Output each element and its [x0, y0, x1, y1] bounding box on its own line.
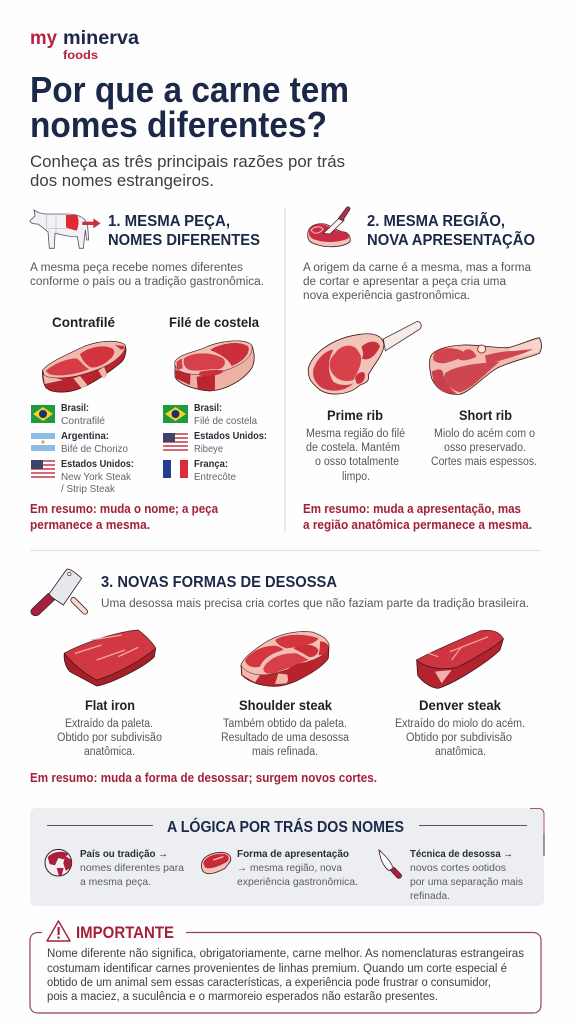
text: shoulder steak description: mais refinada. — [252, 746, 318, 758]
label: Estados Unidos: Estados Unidos: — [61, 458, 134, 470]
flag: França — [163, 460, 188, 478]
icon: globe — [45, 849, 72, 876]
label: França: França: — [194, 458, 228, 470]
flags and names: contrafilé — [31, 402, 134, 495]
text: prime rib description: Mesma região do filé — [306, 428, 405, 440]
label: Argentina: Bifé de Chorizo — [61, 443, 128, 455]
text: prime rib description: de costela. Mantém — [306, 442, 400, 454]
label: Brasil: Brasil: — [61, 402, 89, 414]
text: short rib description: Miolo do acém com o — [434, 428, 535, 440]
text: país ou tradição — [80, 848, 184, 888]
label: França — [194, 458, 236, 483]
text: flat iron description: Obtido por subdivisão — [57, 732, 162, 744]
label: França: Entrecôte — [194, 471, 236, 483]
text: técnica de desossa: por uma separação mais — [410, 876, 523, 888]
flag: Brasil — [163, 405, 188, 423]
text: forma de apresentação: Forma de apresentação — [237, 848, 349, 860]
label: Argentina — [61, 430, 128, 455]
text: denver steak description — [395, 718, 525, 758]
heading — [108, 213, 260, 249]
heading: NOMES DIFERENTES — [108, 232, 260, 249]
label: Estados Unidos: New York Steak — [61, 471, 132, 483]
text: forma de apresentação: experiência gastronômica. — [237, 876, 358, 888]
label: Brasil — [61, 402, 105, 427]
icon: shoulder steak — [241, 632, 329, 686]
text: forma de apresentação — [237, 848, 358, 888]
cut name: Denver steak: Denver steak — [419, 697, 501, 713]
title: Por que a carne tem — [30, 69, 349, 110]
label: Estados Unidos: / Strip Steak — [61, 483, 116, 495]
panel: section 1 mesma peça — [30, 210, 267, 532]
description: de cortar e apresentar a peça cria uma — [303, 276, 507, 288]
icon: steak with knife — [308, 207, 350, 247]
text: denver steak description: Obtido por subdivisão — [406, 732, 512, 744]
heading: 1. MESMA PEÇA, — [108, 213, 230, 230]
label: Estados Unidos — [61, 458, 134, 495]
cut name: Flat iron: Flat iron — [85, 697, 135, 713]
icon: filé de costela steak — [175, 341, 254, 391]
description: Uma desossa mais precisa cria cortes que não faziam parte da tradição brasileira. — [101, 598, 529, 610]
text: warning body: costumam identificar carnes provenientes de linhas premium. Quando um corte especial é — [47, 963, 507, 975]
text: warning body: Nome diferente não significa, obrigatoriamente, carne melhor. As nomenclaturas estrangeiras — [47, 948, 524, 960]
label: Estados Unidos — [194, 430, 267, 455]
text: warning body — [47, 948, 524, 1003]
label: Brasil — [194, 402, 257, 427]
flag: Estados Unidos — [163, 433, 188, 451]
description: A mesma peça recebe nomes diferentes — [30, 262, 243, 274]
text: técnica de desossa: Técnica de desossa → — [410, 848, 513, 860]
icon: warning triangle — [47, 921, 70, 941]
cut name: Filé de costela: Filé de costela — [169, 314, 259, 330]
flag: Estados Unidos — [31, 460, 55, 478]
heading: IMPORTANTE — [76, 923, 174, 942]
label: Argentina: Argentina: — [61, 430, 109, 442]
summary: Em resumo: muda a forma de desossar; surgem novos cortes. — [30, 771, 377, 785]
summary: Em resumo: muda a apresentação, mas — [303, 502, 521, 516]
heading: 2. MESMA REGIÃO, — [367, 212, 505, 230]
description: conforme o país ou a tradição gastronômica. — [30, 276, 264, 288]
text: prime rib description: limpo. — [342, 471, 370, 483]
description — [303, 262, 532, 302]
logo: foods — [63, 48, 98, 62]
text: shoulder steak description: Resultado de uma desossa — [221, 732, 350, 744]
subtitle — [30, 152, 345, 190]
summary: permanece a mesma. — [30, 518, 150, 532]
flag: Argentina — [31, 433, 55, 451]
logo: my — [30, 28, 57, 49]
cut name: Shoulder steak: Shoulder steak — [239, 697, 332, 713]
text: técnica de desossa: refinada. — [410, 890, 450, 902]
text: shoulder steak description — [221, 718, 350, 758]
icon: cleaver and bone — [31, 569, 85, 616]
text: prime rib description — [306, 428, 405, 483]
flags and names: filé de costela — [163, 402, 267, 483]
heading: NOVA APRESENTAÇÃO — [367, 231, 535, 249]
logo — [30, 28, 139, 62]
text: país ou tradição: nomes diferentes para — [80, 862, 184, 874]
panel: a lógica por trás dos nomes — [30, 808, 544, 906]
title — [30, 69, 349, 145]
text: prime rib description: o osso totalmente — [315, 456, 399, 468]
summary — [30, 502, 219, 532]
text: shoulder steak description: Também obtido da paleta. — [223, 718, 347, 730]
text: país ou tradição: País ou tradição → — [80, 848, 168, 860]
text: denver steak description: Extraído do miolo do acém. — [395, 718, 525, 730]
callout: importante — [30, 921, 541, 1013]
cut name: Short rib: Short rib — [459, 407, 512, 423]
text: país ou tradição: a mesma peça. — [80, 876, 151, 888]
icon: short rib — [430, 338, 541, 394]
label: Brasil: Brasil: — [194, 402, 222, 414]
text: short rib description: osso preservado. — [444, 442, 526, 454]
text: técnica de desossa — [410, 848, 523, 902]
subtitle: Conheça as três principais razões por trás — [30, 152, 345, 171]
text: short rib description — [431, 428, 537, 468]
summary: Em resumo: muda o nome; a peça — [30, 502, 219, 516]
label: Brasil: Filé de costela — [194, 415, 257, 427]
description: nova experiência gastronômica. — [303, 290, 470, 302]
text: flat iron description: anatômica. — [84, 746, 135, 758]
icon: cow with red cut and arrow — [30, 210, 101, 248]
text: flat iron description: Extraído da paleta. — [65, 718, 153, 730]
heading: A LÓGICA POR TRÁS DOS NOMES — [167, 818, 404, 836]
icon: steak — [201, 852, 231, 874]
text: short rib description: Cortes mais espessos. — [431, 456, 537, 468]
summary — [303, 502, 532, 532]
title: nomes diferentes? — [30, 104, 327, 145]
icon: knife — [379, 850, 402, 878]
text: denver steak description: anatômica. — [435, 746, 486, 758]
label: Estados Unidos: Estados Unidos: — [194, 430, 267, 442]
text: warning body: obtido de um animal sem essas características, a experiência pode frustrar o consumidor, — [47, 977, 491, 989]
icon: denver steak — [417, 630, 503, 688]
label: Brasil: Contrafilé — [61, 415, 105, 427]
panel: section 2 mesma região — [303, 207, 541, 532]
text: forma de apresentação: → mesma região, nova — [237, 862, 342, 874]
description — [30, 262, 264, 288]
text: técnica de desossa: novos cortes ootidos — [410, 862, 506, 874]
icon: contrafilé steak — [42, 341, 126, 392]
cut name: Prime rib: Prime rib — [327, 407, 383, 423]
icon: flat iron — [64, 630, 156, 686]
subtitle: dos nomes estrangeiros. — [30, 171, 214, 190]
description: A origem da carne é a mesma, mas a forma — [303, 262, 532, 274]
heading — [367, 212, 535, 249]
text: warning body: pois a maciez, a suculência e o marmoreio esperados não estarão presentes. — [47, 991, 438, 1003]
panel: section 3 novas formas de desossa — [30, 569, 529, 785]
icon: prime rib — [308, 322, 421, 394]
flag: Brasil — [31, 405, 55, 423]
cut name: Contrafilé: Contrafilé — [52, 314, 115, 330]
summary: a região anatômica permanece a mesma. — [303, 518, 532, 532]
text: flat iron description — [57, 718, 162, 758]
logo: minerva — [63, 28, 139, 49]
heading: 3. NOVAS FORMAS DE DESOSSA — [101, 574, 337, 591]
label: Estados Unidos: Ribeye — [194, 443, 223, 455]
